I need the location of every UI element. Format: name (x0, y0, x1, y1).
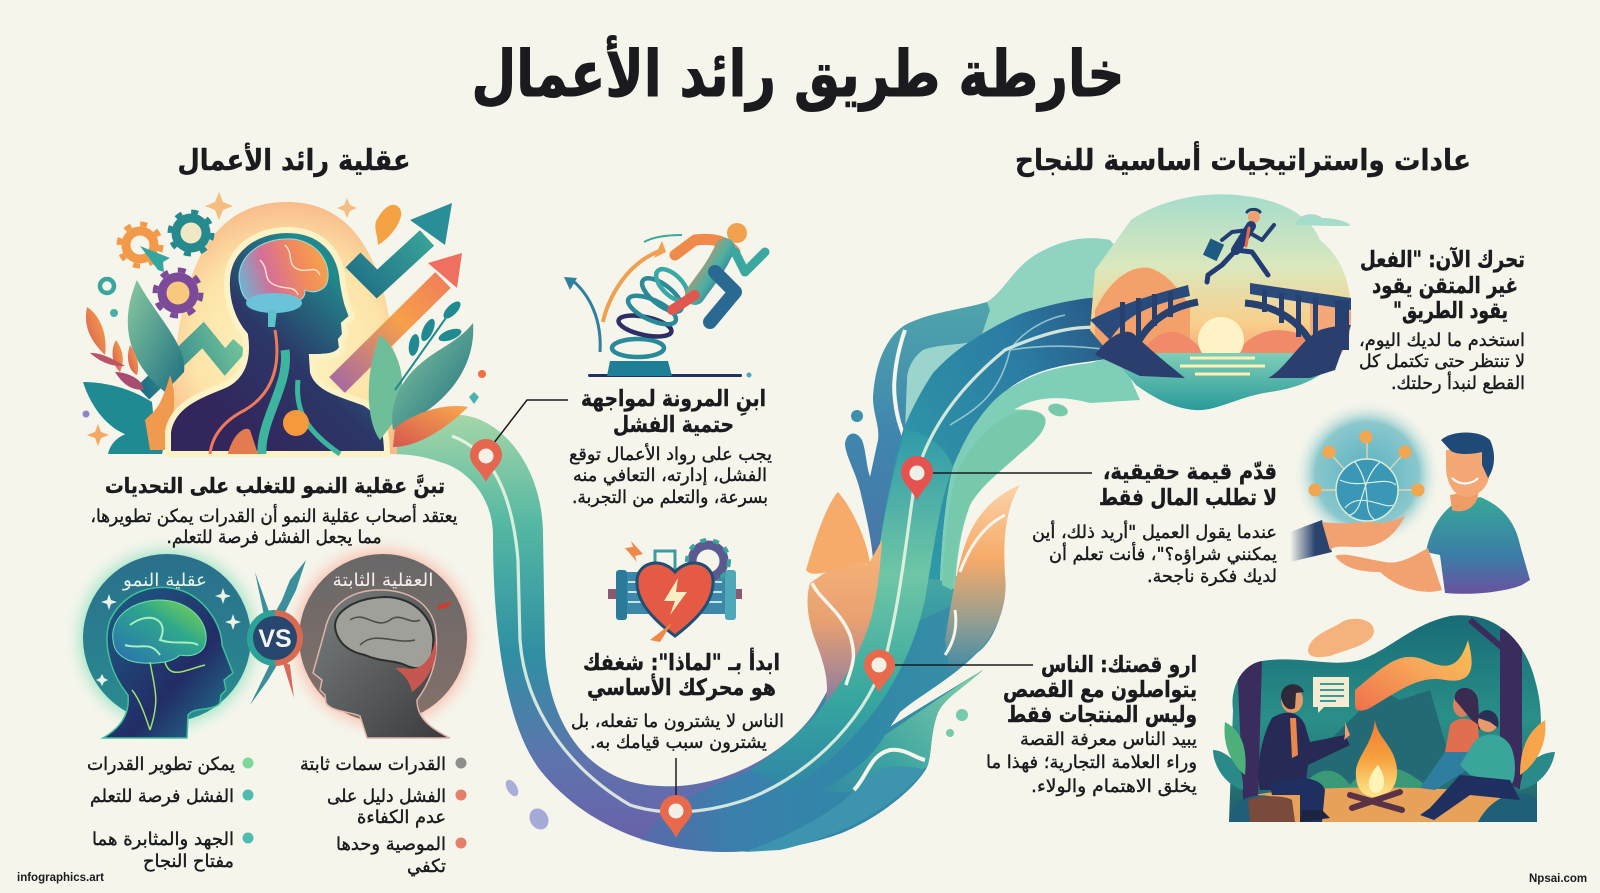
sun (1198, 317, 1244, 353)
bridge right span (1245, 283, 1351, 352)
upper hand and sleeve (1290, 516, 1405, 562)
block: adopt a growth mindset (90, 474, 458, 548)
small teal gear (100, 279, 114, 293)
orange rising arrow (337, 253, 462, 385)
block: adopt a growth mindset: يعتقد أصحاب عقلية النمو أن القدرات يمكن تطويرها، (90, 504, 458, 527)
illustration: campfire storytelling (1213, 610, 1555, 825)
block: start with why: يشترون سبب قيامك به. (590, 733, 767, 753)
fixed mindset bullets: الموصية وحدها (336, 834, 446, 855)
brain (239, 239, 328, 327)
coil spring (612, 264, 693, 357)
block: offer real value: لا تطلب المال فقط (1099, 485, 1277, 511)
illustration: man with globe (1290, 400, 1530, 594)
orange cloud (1308, 619, 1374, 657)
block: move now: غير المتقن يقود (1372, 273, 1518, 299)
source: infographics.art: infographics.art (17, 872, 104, 884)
small accents (82, 192, 486, 446)
block: tell your story: يخلق الاهتمام والولاء. (1031, 777, 1197, 797)
storyteller (1248, 684, 1350, 822)
listeners (1420, 688, 1520, 820)
river centre highlight (452, 327, 1105, 812)
head silhouette (168, 230, 387, 454)
block: tell your story: يبيد الناس معرفة القصة (1020, 730, 1197, 750)
illustration: leap across the bridge (1085, 190, 1360, 413)
heart (637, 563, 713, 636)
purple gear (155, 270, 201, 316)
river lower green wave (820, 670, 983, 793)
comparison: fixed mind head (279, 534, 487, 742)
left leaves (83, 280, 184, 454)
block: build resilience: الفشل، إدارته، التعافي منه (573, 466, 767, 486)
block: offer real value (1032, 459, 1277, 587)
globe glow (1293, 400, 1441, 548)
grey brain (335, 597, 436, 692)
left zigzag arrow (143, 335, 240, 393)
block: start with why: هو محركك الأساسي (587, 673, 776, 701)
pin: real value (901, 456, 933, 500)
roadmap river path (385, 238, 1192, 852)
mountains (1306, 690, 1472, 780)
plants (1213, 720, 1555, 822)
comparison: growth mind head: عقلية النمو (122, 570, 207, 591)
block: build resilience: بسرعة، والتعلم من التجربة. (572, 488, 768, 508)
engine (608, 540, 742, 620)
growth mindset bullets: مفتاح النجاح (143, 851, 234, 872)
block: start with why (571, 647, 784, 753)
block: offer real value: يمكنني شراؤه؟"، فأنت تعلم أن (1049, 542, 1277, 565)
hills (1095, 268, 1190, 346)
block: tell your story: وراء العلامة التجارية؛ فهذا ما (986, 753, 1197, 773)
leader line: resilience (490, 400, 568, 448)
block: move now: استخدم ما لديك اليوم، (1359, 331, 1525, 351)
growth mindset bullets: يمكن تطوير القدرات (87, 754, 235, 775)
spring base (588, 361, 752, 378)
campfire (1350, 720, 1402, 810)
leader line: tell your story (879, 664, 1033, 666)
versus badge: VS (258, 625, 292, 653)
pin: resilience (470, 439, 502, 482)
river pale panel (905, 342, 973, 430)
speech bubble (1313, 677, 1349, 713)
halo (173, 202, 397, 454)
river lower U band (385, 415, 1005, 852)
heading: habits and strategies: عادات واستراتيجيات أساسية للنجاح (1015, 141, 1471, 177)
comparison: fixed mind head: العقلية الثابتة (332, 570, 434, 591)
block: tell your story: يتواصلون مع القصص (1003, 677, 1197, 703)
versus badge (247, 560, 306, 705)
lower arm (1335, 548, 1442, 592)
comparison: growth mind head (63, 534, 271, 742)
river pale teal back wave (950, 238, 1160, 345)
icon: spring and runner (564, 223, 765, 378)
block: tell your story (986, 652, 1197, 797)
orange sphere (283, 410, 309, 436)
water (1122, 353, 1342, 410)
ground (1258, 788, 1502, 822)
source: Npsai.com: Npsai.com (1529, 873, 1587, 885)
teal gear (170, 212, 212, 254)
right leaves (369, 299, 473, 447)
block: build resilience: ابنِ المرونة لمواجهة (581, 386, 766, 417)
running businessman (1203, 209, 1274, 282)
fixed mindset bullets: تكفي (407, 856, 446, 877)
leader line: real value (917, 472, 1092, 474)
pin: tell your story (864, 650, 895, 692)
block: adopt a growth mindset: مما يجعل الفشل فرصة للتعلم. (166, 527, 382, 548)
river upper blue band (877, 287, 1192, 580)
heading: entrepreneur mindset: عقلية رائد الأعمال (178, 142, 410, 177)
block: tell your story: وليس المنتجات فقط (1007, 702, 1197, 728)
rock right (1268, 325, 1351, 378)
block: start with why: ابدأ بـ "لماذا": شغفك (583, 647, 780, 676)
block: move now: تحرك الآن: "الفعل (1360, 246, 1525, 273)
river drops (946, 402, 1069, 737)
fixed mindset bullets: عدم الكفاءة (357, 807, 446, 828)
block: move now: يقود الطريق" (1393, 298, 1508, 324)
block: move now: القطع لنبدأ رحلتك. (1391, 371, 1525, 394)
network globe (1308, 430, 1424, 521)
block: offer real value: عندما يقول العميل "أريد ذلك، أين (1032, 520, 1277, 543)
river right flame (945, 485, 1020, 672)
fixed mindset bullets: القدرات سمات ثابتة (300, 754, 446, 775)
block: build resilience: حتمية الفشل (613, 412, 734, 438)
clouds (1295, 214, 1350, 226)
growth mindset bullets (87, 754, 254, 872)
icon: heart engine (608, 540, 742, 642)
river outer pale teal band (940, 355, 1140, 590)
bridge left span (1090, 285, 1198, 352)
fixed mindset bullets (300, 754, 466, 877)
block: build resilience (569, 386, 772, 508)
head (1441, 432, 1494, 511)
title: خارطة طريق رائد الأعمال (472, 35, 1124, 112)
river left splash (845, 302, 990, 640)
green brain (113, 600, 206, 730)
river left flame (808, 540, 882, 703)
fixed mindset bullets: الفشل دليل على (327, 786, 446, 807)
block: move now (1359, 246, 1525, 394)
block: build resilience: يجب على رواد الأعمال توقع (569, 443, 772, 465)
block: tell your story: ارو قصتك: الناس (1041, 652, 1197, 678)
leader line: start with why (675, 758, 677, 805)
arrows (564, 235, 682, 352)
trees (1237, 660, 1262, 800)
growth mindset bullets: الفشل فرصة للتعلم (90, 786, 234, 807)
river middle green band (750, 430, 953, 790)
teal zigzag arrow (353, 203, 452, 284)
story ribbon (1355, 640, 1472, 711)
block: offer real value: قدّم قيمة حقيقية، (1103, 459, 1277, 485)
block: move now: لا تنتظر حتى تكتمل كل (1359, 352, 1525, 372)
runner (672, 223, 765, 322)
orange gear (119, 224, 161, 266)
block: adopt a growth mindset: تبنَّ عقلية النمو للتغلب على التحديات (105, 474, 445, 498)
growth mindset bullets: الجهد والمثابرة هما (92, 829, 234, 850)
rock left (1095, 332, 1185, 378)
pin: start with why (660, 795, 692, 838)
illustration: entrepreneur mind (82, 192, 486, 454)
shirt (1426, 497, 1530, 594)
block: offer real value: لديك فكرة ناجحة. (1147, 567, 1277, 587)
block: start with why: الناس لا يشترون ما تفعله، بل (571, 712, 784, 732)
body energy lines (210, 330, 340, 454)
